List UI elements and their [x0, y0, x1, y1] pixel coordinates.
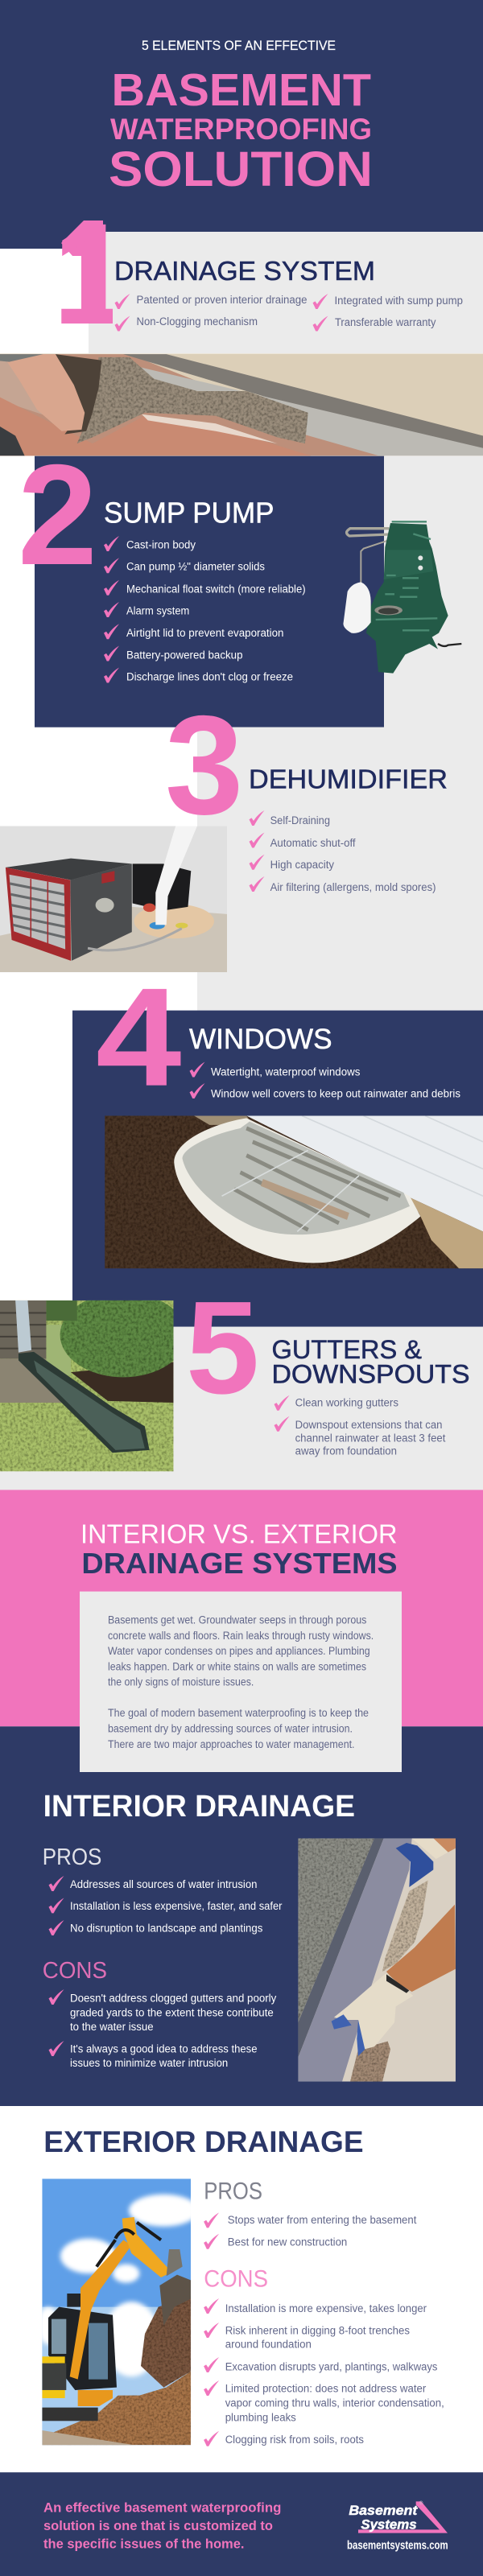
- checklist: exterior cons: [204, 2298, 444, 2446]
- checklist: sump pump features: Airtight lid to prevent evaporation: [126, 627, 283, 639]
- website url: basementsystems.com: [347, 2539, 448, 2553]
- checklist: interior cons: Doesn't address clogged gutters and poorly: [70, 1992, 277, 2004]
- title kicker: 5 ELEMENTS OF AN EFFECTIVE: [142, 38, 336, 53]
- checklist: windows features: Window well covers to keep out rainwater and debris: [211, 1088, 460, 1100]
- checklist: exterior cons: vapor coming thru walls, interior condensation,: [225, 2397, 444, 2409]
- logo: basement systems: ®: [419, 2500, 423, 2506]
- header panel: [0, 0, 483, 249]
- heading: interior pros: PROS: [43, 1844, 101, 1870]
- panel: element 3 dehumidifier: [0, 687, 483, 1011]
- heading: exterior cons: CONS: [204, 2265, 268, 2292]
- logo: basement systems: [349, 2500, 448, 2533]
- main title: BASEMENT: [111, 64, 371, 116]
- text box: basements get wet: the only signs of moisture issues.: [108, 1676, 254, 1688]
- numeral 5: 5: [186, 1274, 259, 1421]
- text box: basements get wet: concrete walls and floors. Rain leaks through rusty windows.: [108, 1630, 374, 1642]
- heading: gutters and downspouts: GUTTERS &: [272, 1335, 422, 1364]
- checklist: exterior pros: Stops water from entering the basement: [228, 2214, 417, 2226]
- closing statement: solution is one that is customized to: [43, 2518, 273, 2533]
- checklist: sump pump features: [104, 536, 306, 683]
- checklist: dehumidifier features: Self-Draining: [270, 814, 330, 826]
- checklist: interior cons: [48, 1989, 277, 2069]
- checklist: sump pump features: Cast-iron body: [126, 538, 196, 550]
- logo: basement systems: Systems: [361, 2517, 417, 2533]
- checklist: interior cons: graded yards to the extent these contribute: [70, 2006, 274, 2018]
- checklist: sump pump features: Battery-powered backup: [126, 649, 243, 662]
- heading: drainage system: DRAINAGE SYSTEM: [114, 256, 375, 286]
- heading: gutters and downspouts: [272, 1335, 470, 1389]
- checklist: dehumidifier features: Automatic shut-off: [270, 837, 356, 849]
- checklist: dehumidifier features: [250, 810, 436, 893]
- main title: SOLUTION: [109, 142, 373, 196]
- numeral 4: 4: [96, 958, 181, 1115]
- heading: dehumidifier: DEHUMIDIFIER: [249, 765, 448, 794]
- numeral 1: 1: [52, 193, 133, 354]
- checklist: gutters features: [274, 1395, 446, 1457]
- photo: sump pump: [343, 521, 461, 674]
- panel: element 1 drainage system: [61, 221, 483, 353]
- checklist: interior cons: issues to minimize water intrusion: [70, 2057, 228, 2069]
- panel: footer: [0, 2472, 483, 2576]
- panel: interior drainage: [43, 1790, 456, 2082]
- heading: exterior pros: PROS: [204, 2178, 262, 2204]
- photo: installing interior drain channel: [298, 1838, 456, 2082]
- checklist: exterior cons: Limited protection: does not address water: [225, 2382, 427, 2394]
- checklist: exterior pros: [204, 2212, 417, 2249]
- closing statement: the specific issues of the home.: [43, 2537, 245, 2551]
- text box: basements get wet: leaks happen. Dark or white stains on walls are sometimes: [108, 1661, 366, 1672]
- checklist: sump pump features: Alarm system: [126, 605, 189, 617]
- checklist: exterior cons: Risk inherent in digging 8-foot trenches: [225, 2324, 410, 2336]
- checklist: exterior cons: around foundation: [225, 2339, 312, 2351]
- panel: interior vs exterior intro: [0, 1490, 483, 2106]
- closing statement: [43, 2500, 281, 2551]
- checklist: exterior cons: Clogging risk from soils, roots: [225, 2434, 364, 2446]
- main title: [109, 64, 373, 196]
- checklist: interior pros: Addresses all sources of water intrusion: [70, 1878, 258, 1890]
- checklist: dehumidifier features: High capacity: [270, 859, 334, 871]
- text box: basements get wet: Water vapor condenses on pipes and appliances. Plumbing: [108, 1645, 370, 1657]
- numeral 2: 2: [18, 435, 97, 595]
- heading: interior cons: CONS: [43, 1958, 107, 1984]
- checklist: interior pros: Installation is less expensive, faster, and safer: [70, 1900, 283, 1912]
- photo: interior drain channel and gravel: [0, 353, 483, 455]
- checklist: gutters features: Downspout extensions that can: [295, 1419, 443, 1431]
- text box: basements get wet: There are two major approaches to water management.: [108, 1738, 354, 1750]
- checklist: drainage features: Non-Clogging mechanism: [137, 315, 258, 328]
- checklist: exterior cons: Excavation disrupts yard, plantings, walkways: [225, 2360, 438, 2372]
- text box: basements get wet: basement dry by addressing sources of water intrusion.: [108, 1722, 353, 1734]
- checklist: windows features: [190, 1062, 460, 1100]
- logo: basement systems: Basement: [349, 2503, 419, 2518]
- checklist: sump pump features: Mechanical float switch (more reliable): [126, 583, 306, 595]
- heading: drainage systems: DRAINAGE SYSTEMS: [81, 1547, 398, 1580]
- checklist: interior cons: to the water issue: [70, 2021, 154, 2033]
- text box: basements get wet: The goal of modern basement waterproofing is to keep the: [108, 1707, 369, 1719]
- photo: downspout extension: [0, 1300, 174, 1471]
- panel: element 2 sump pump: [18, 435, 483, 727]
- text box: basements get wet: Basements get wet. Groundwater seeps in through porous: [108, 1614, 367, 1626]
- main title: WATERPROOFING: [110, 113, 372, 146]
- numeral 3: 3: [165, 687, 243, 844]
- text box: basements get wet: [80, 1592, 402, 1772]
- checklist: drainage features: Integrated with sump pump: [335, 295, 463, 307]
- photo: excavator digging: [38, 2178, 199, 2445]
- checklist: drainage features: Patented or proven interior drainage: [137, 294, 308, 306]
- checklist: exterior cons: plumbing leaks: [225, 2411, 296, 2423]
- checklist: gutters features: channel rainwater at least 3 feet: [295, 1432, 446, 1444]
- panel: element 5 gutters and downspouts: [0, 1300, 483, 1490]
- checklist: interior pros: [48, 1876, 283, 1935]
- checklist: gutters features: away from foundation: [295, 1445, 397, 1457]
- panel: element 4 windows: [72, 958, 483, 1327]
- checklist: drainage features: Transferable warranty: [335, 316, 436, 328]
- checklist: sump pump features: Can pump ½" diameter solids: [126, 561, 265, 573]
- panel: exterior drainage: [38, 2125, 444, 2446]
- closing statement: An effective basement waterproofing: [43, 2500, 281, 2515]
- heading: gutters and downspouts: DOWNSPOUTS: [272, 1360, 470, 1389]
- checklist: sump pump features: Discharge lines don't clog or freeze: [126, 671, 293, 683]
- checklist: drainage features: [114, 294, 463, 332]
- heading: exterior drainage: EXTERIOR DRAINAGE: [43, 2125, 364, 2158]
- checklist: windows features: Watertight, waterproof windows: [211, 1065, 361, 1078]
- photo: window well cover: [105, 1115, 483, 1268]
- heading: interior drainage: INTERIOR DRAINAGE: [43, 1790, 355, 1824]
- checklist: interior pros: No disruption to landscape and plantings: [70, 1922, 263, 1935]
- checklist: gutters features: Clean working gutters: [295, 1397, 398, 1409]
- checklist: dehumidifier features: Air filtering (allergens, mold spores): [270, 881, 436, 893]
- checklist: exterior pros: Best for new construction: [228, 2236, 347, 2248]
- checklist: interior cons: It's always a good idea to address these: [70, 2042, 258, 2055]
- numeral 1: [61, 221, 113, 324]
- heading: windows: WINDOWS: [189, 1024, 332, 1055]
- heading: sump pump: SUMP PUMP: [104, 496, 274, 529]
- heading: interior vs exterior: INTERIOR VS. EXTERIOR: [80, 1519, 398, 1549]
- checklist: exterior cons: Installation is more expensive, takes longer: [225, 2302, 427, 2314]
- photo: dehumidifier and sump: [0, 826, 227, 972]
